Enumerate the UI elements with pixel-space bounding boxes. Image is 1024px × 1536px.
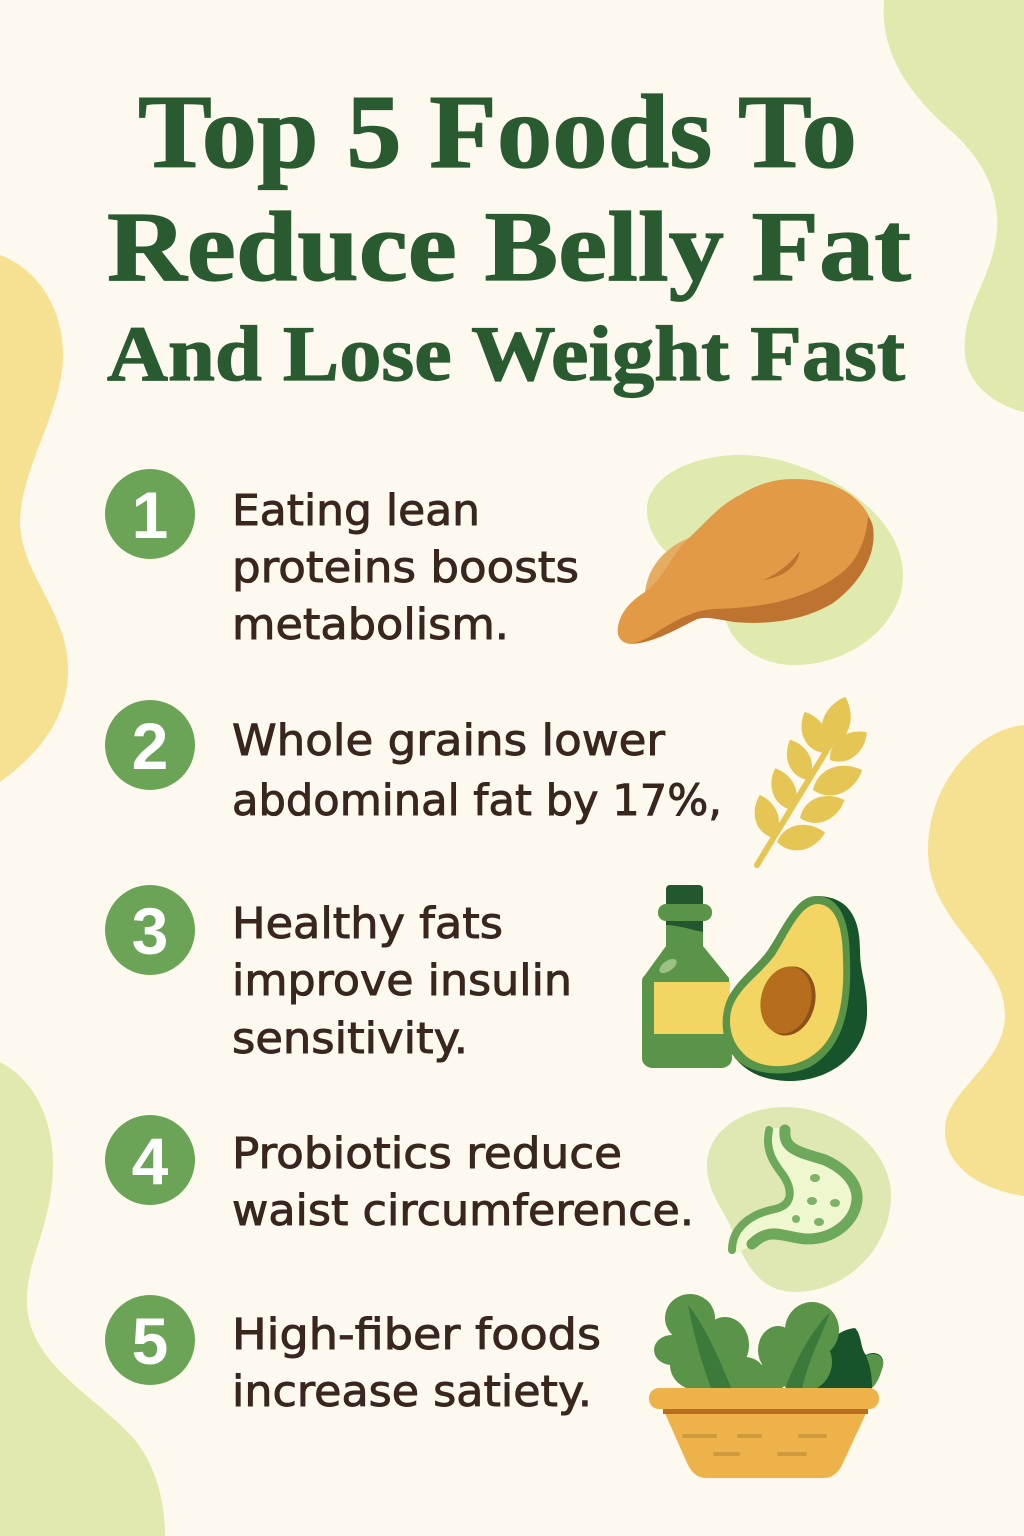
icon: wheat sprig — [749, 692, 874, 865]
text: item 4: Probiotics reduce — [232, 1129, 622, 1179]
text: item 1: metabolism. — [232, 600, 509, 650]
text: item 4: waist circumference. — [232, 1186, 694, 1236]
icon: stomach on green blob — [707, 1107, 891, 1292]
number badge 1: 1 — [132, 478, 168, 552]
text: item 5: High-fiber foods — [232, 1310, 601, 1360]
number badge 2 — [105, 700, 195, 790]
number badge 4: 4 — [132, 1124, 169, 1198]
text: item 3: sensitivity. — [232, 1014, 468, 1064]
icon: oil bottle — [642, 885, 732, 1068]
text: item 1 — [232, 486, 579, 650]
text: item 3 — [232, 899, 572, 1064]
title line 3: And Lose Weight Fast — [107, 310, 905, 397]
text: item 3: Healthy fats — [232, 899, 503, 949]
text: item 2: Whole grains lower — [232, 716, 665, 766]
title line 2: Reduce Belly Fat — [107, 191, 911, 302]
background blob: right yellow — [928, 725, 1024, 1196]
text: item 4 — [232, 1129, 694, 1236]
text: item 5 — [232, 1310, 601, 1417]
background blob: left yellow — [0, 255, 68, 782]
background blob: bottom left green — [0, 1062, 165, 1536]
title — [107, 73, 911, 397]
icon: avocado half — [723, 896, 867, 1081]
number badge 4 — [105, 1115, 195, 1205]
number badge 3 — [105, 885, 195, 975]
text: item 2: abdominal fat by 17%, — [232, 776, 722, 826]
number badge 1 — [105, 469, 195, 559]
text: item 1: proteins boosts — [232, 543, 579, 593]
icon: chicken breast on green blob — [618, 455, 903, 665]
number badge 5: 5 — [132, 1304, 168, 1378]
number badge 2: 2 — [132, 709, 168, 783]
text: item 1: Eating lean — [232, 486, 480, 536]
background blob: top right green — [884, 0, 1024, 412]
text: item 3: improve insulin — [232, 956, 572, 1006]
icon: basket of leafy greens — [649, 1294, 883, 1478]
title line 1: Top 5 Foods To — [138, 73, 857, 190]
number badge 5 — [105, 1295, 195, 1385]
number badge 3: 3 — [132, 894, 168, 968]
text: item 2 — [232, 716, 722, 826]
text: item 5: increase satiety. — [232, 1367, 592, 1417]
